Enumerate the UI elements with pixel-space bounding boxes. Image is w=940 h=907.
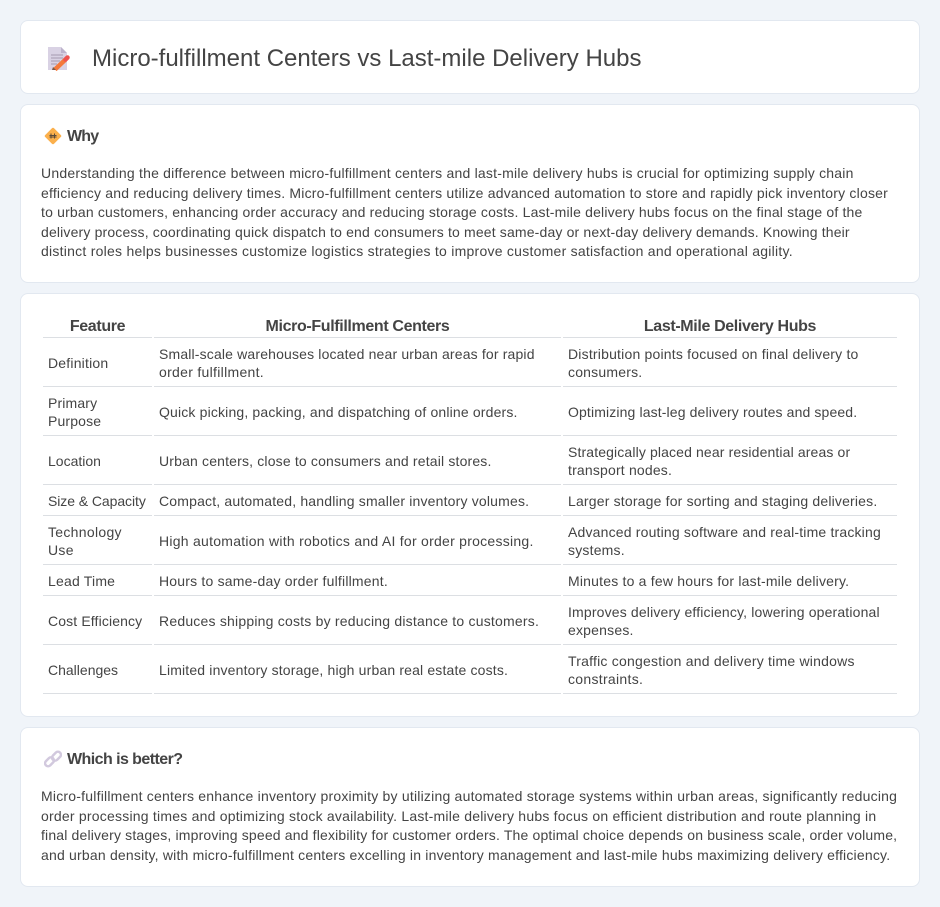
row: technology use: Advanced routing software and real-time tracking xyxy=(568,524,881,540)
row: definition: Distribution points focused on final delivery to xyxy=(568,346,859,362)
row: technology use: systems. xyxy=(568,542,625,558)
row: lead time: Hours to same-day order fulfillment. xyxy=(159,573,388,589)
text: which is better paragraph: Micro-fulfillment centers enhance inventory proximity by utilizing automated storage systems within urban areas, significantly reducing xyxy=(41,788,897,804)
row: technology use: Use xyxy=(48,542,74,558)
row: lead time: Minutes to a few hours for last-mile delivery. xyxy=(568,573,849,589)
text: why paragraph: Understanding the difference between micro-fulfillment centers and last-mile delivery hubs is crucial for optimizing supply chain xyxy=(41,165,854,181)
row: primary purpose: Purpose xyxy=(48,413,101,429)
row: primary purpose: Primary xyxy=(48,395,97,411)
text: why paragraph: delivery process, coordinating quick dispatch to end consumers to meet same-day or next-day delivery demands. Knowing their xyxy=(41,224,850,240)
row: cost efficiency xyxy=(43,604,897,645)
row: lead time: Lead Time xyxy=(48,573,115,589)
row: definition xyxy=(43,346,897,387)
text: which is better paragraph: final delivery stages, improving speed and flexibility for customer orders. The optimal choice depends on business scale, order volume, xyxy=(41,827,897,843)
text: why paragraph xyxy=(41,165,888,259)
row: challenges: constraints. xyxy=(568,671,643,687)
row: cost efficiency: expenses. xyxy=(568,622,634,638)
row: location xyxy=(43,444,897,485)
row: location: Location xyxy=(48,453,101,469)
text: which is better paragraph: and urban density, with micro-fulfillment centers excelling in inventory management and last-mile hubs maximizing delivery efficiency. xyxy=(41,847,890,863)
text: why paragraph: efficiency and reducing delivery times. Micro-fulfillment centers utilize advanced automation to store and rapidly pick inventory closer xyxy=(41,185,888,201)
row: cost efficiency: Improves delivery efficiency, lowering operational xyxy=(568,604,880,620)
text: why paragraph: to urban customers, enhancing order accuracy and reducing storage costs. Last-mile delivery hubs focus on the final stage of the xyxy=(41,204,862,220)
row: primary purpose xyxy=(43,395,897,436)
row: location: transport nodes. xyxy=(568,462,672,478)
row: challenges xyxy=(43,653,897,694)
row: definition: Small-scale warehouses located near urban areas for rapid xyxy=(159,346,535,362)
table header xyxy=(43,318,897,338)
row: technology use: High automation with robotics and AI for order processing. xyxy=(159,533,534,549)
icon: warning diamond xyxy=(44,128,62,144)
table header: Feature xyxy=(70,318,125,335)
panel: title card xyxy=(20,20,920,94)
row: lead time xyxy=(43,573,897,596)
row: location: Strategically placed near residential areas or xyxy=(568,444,850,460)
text: why paragraph: distinct roles helps businesses customize logistics strategies to improve customer satisfaction and operational agility. xyxy=(41,243,793,259)
row: technology use xyxy=(43,524,897,565)
heading: why: Why xyxy=(67,128,98,145)
row: definition: consumers. xyxy=(568,364,642,380)
icon: link xyxy=(44,750,62,768)
row: challenges: Challenges xyxy=(48,662,118,678)
table header: Last-Mile Delivery Hubs xyxy=(644,318,816,335)
row: size and capacity: Size & Capacity xyxy=(48,493,146,509)
row: size and capacity xyxy=(43,493,897,516)
heading: which is better: Which is better? xyxy=(67,751,182,768)
icon: memo with pencil xyxy=(48,47,70,71)
table header: Micro-Fulfillment Centers xyxy=(266,318,449,335)
text: which is better paragraph xyxy=(41,788,897,863)
row: challenges: Limited inventory storage, high urban real estate costs. xyxy=(159,662,508,678)
row: technology use: Technology xyxy=(48,524,122,540)
row: size and capacity: Larger storage for sorting and staging deliveries. xyxy=(568,493,877,509)
panel: which is better xyxy=(20,727,920,887)
row: challenges: Traffic congestion and delivery time windows xyxy=(568,653,855,669)
row: cost efficiency: Cost Efficiency xyxy=(48,613,142,629)
text: which is better paragraph: order processing times and optimizing stock availability. Last-mile delivery hubs focus on efficient distribution and route planning in xyxy=(41,808,876,824)
row: primary purpose: Optimizing last-leg delivery routes and speed. xyxy=(568,404,857,420)
row: size and capacity: Compact, automated, handling smaller inventory volumes. xyxy=(159,493,529,509)
panel: why xyxy=(20,104,920,283)
title: Micro-fulfillment Centers vs Last-mile Delivery Hubs xyxy=(92,45,641,72)
row: definition: order fulfillment. xyxy=(159,364,264,380)
panel: comparison table xyxy=(20,293,920,717)
row: location: Urban centers, close to consumers and retail stores. xyxy=(159,453,492,469)
row: cost efficiency: Reduces shipping costs by reducing distance to customers. xyxy=(159,613,539,629)
row: primary purpose: Quick picking, packing, and dispatching of online orders. xyxy=(159,404,518,420)
row: definition: Definition xyxy=(48,355,108,371)
